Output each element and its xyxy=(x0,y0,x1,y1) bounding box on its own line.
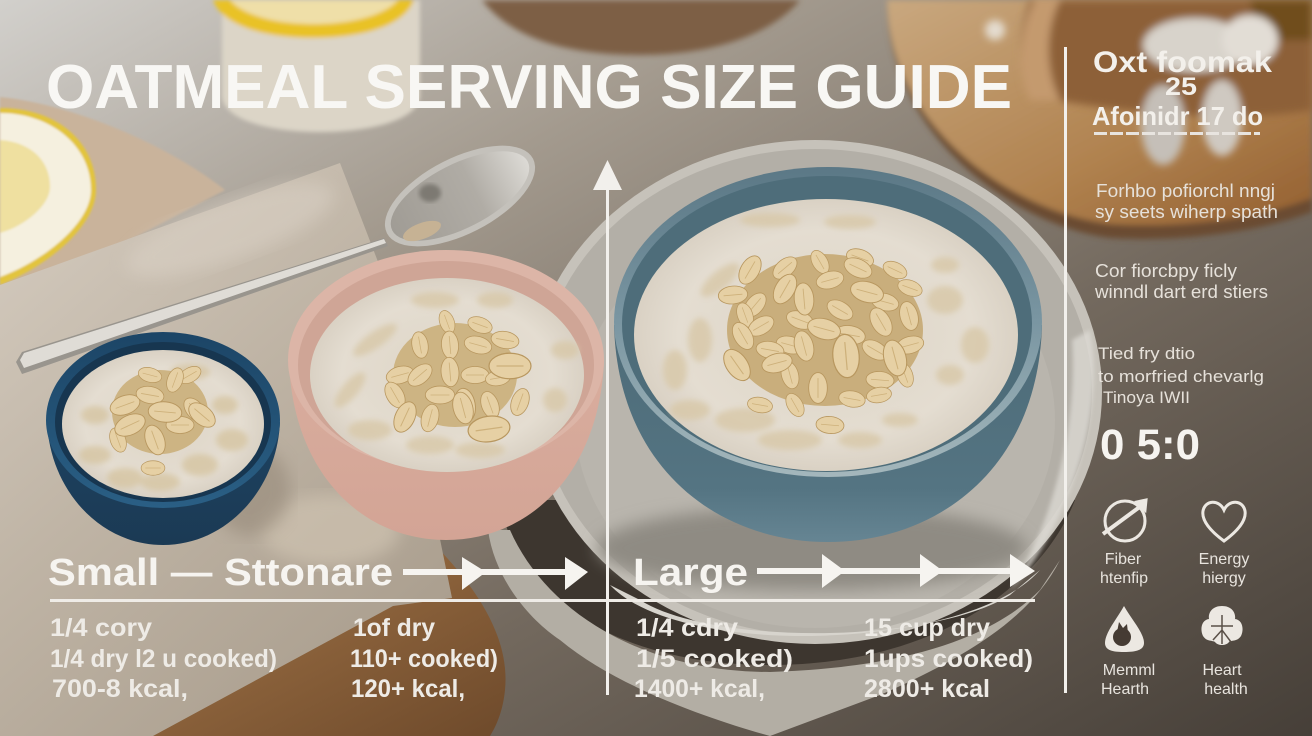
right panel divider xyxy=(1064,47,1067,693)
label: mental health: Memml xyxy=(1103,662,1155,679)
column: standard serving: 120+ kcal, xyxy=(351,675,465,703)
column: standard serving: 110+ cooked) xyxy=(350,645,498,673)
plate xyxy=(528,140,1102,644)
column: small serving: 1/4 dry l2 u cooked) xyxy=(50,645,277,673)
icon: heart health xyxy=(1201,606,1243,645)
side text block 1: sy seets wiherp spath xyxy=(1095,202,1278,222)
side text block 3: Tinoya IWII xyxy=(1103,388,1190,407)
wooden board top center xyxy=(482,0,800,55)
dark gap beneath plate xyxy=(500,500,1075,665)
column: extra large serving xyxy=(864,614,1033,703)
label: fiber xyxy=(1100,551,1148,587)
label: mental health xyxy=(1101,662,1155,698)
vertical axis with arrow xyxy=(593,160,622,695)
lemon slice xyxy=(0,108,96,285)
label: heart health xyxy=(1202,662,1248,698)
oats: medium bowl xyxy=(381,308,533,445)
column: standard serving xyxy=(350,614,498,703)
large heading with arrows: Large xyxy=(633,552,748,594)
medium bowl xyxy=(288,250,604,540)
small and standard heading with arrows xyxy=(48,552,588,594)
icon: fiber xyxy=(1103,500,1146,541)
label: energy xyxy=(1199,551,1249,587)
column: large serving xyxy=(634,614,793,703)
horizontal divider xyxy=(50,599,1035,602)
column: small serving xyxy=(50,614,277,703)
column: small serving: 700-8 kcal, xyxy=(52,675,188,703)
lower wooden board xyxy=(130,540,506,736)
wooden board behind lemon xyxy=(0,97,225,290)
milk clumps: large bowl xyxy=(663,213,989,450)
side big number: 0 5:0 xyxy=(1100,421,1200,469)
blurred bread and garnish top right xyxy=(985,0,1312,165)
side text block 2 xyxy=(1094,261,1268,302)
icon: energy heart xyxy=(1203,502,1245,541)
label: energy: Energy xyxy=(1199,551,1249,568)
label: energy: hiergy xyxy=(1202,570,1246,587)
lower cloth under plate xyxy=(488,530,1060,736)
small bowl xyxy=(46,332,280,545)
column: extra large serving: 2800+ kcal xyxy=(864,675,990,703)
side text block 2: winndl dart erd stiers xyxy=(1094,282,1268,302)
side text block 3: to morfried chevarlg xyxy=(1098,367,1264,386)
label: heart health: Heart xyxy=(1202,662,1242,679)
column: large serving: 1/4 cdry xyxy=(636,614,738,642)
label: fiber: Fiber xyxy=(1105,551,1142,568)
oats: large bowl xyxy=(718,245,926,435)
column: extra large serving: 1ups cooked) xyxy=(864,645,1033,673)
label: mental health: Hearth xyxy=(1101,681,1149,698)
oats: small bowl xyxy=(107,363,220,475)
side panel heading: Oxt foomak xyxy=(1093,46,1272,79)
side text block 1 xyxy=(1095,181,1278,222)
column: large serving: 1/5 cooked) xyxy=(636,645,793,673)
large bowl xyxy=(614,167,1042,542)
side panel heading: Afoinidr 17 do xyxy=(1092,101,1263,131)
side text block 3: Tied fry dtio xyxy=(1098,344,1195,363)
column: large serving: 1400+ kcal, xyxy=(634,675,765,703)
small and standard heading with arrows: Small — Sttonare xyxy=(48,552,393,594)
side text block 2: Cor fiorcbpy ficly xyxy=(1095,261,1237,281)
napkin xyxy=(0,163,452,736)
wooden board top right xyxy=(887,0,1312,239)
column: standard serving: 1of dry xyxy=(353,614,435,642)
icon: flame drop xyxy=(1105,606,1144,652)
side panel heading: 25 xyxy=(1165,73,1197,101)
large heading with arrows xyxy=(633,552,1035,594)
side text block 1: Forhbo pofiorchl nngj xyxy=(1096,181,1275,201)
column: small serving: 1/4 cory xyxy=(50,614,152,642)
milk clumps: small bowl xyxy=(79,364,248,491)
column: extra large serving: 15 cup dry xyxy=(864,614,990,642)
label: heart health: health xyxy=(1204,681,1248,698)
side text block 3 xyxy=(1098,344,1264,407)
jar with lemon lid xyxy=(213,0,420,132)
spoon xyxy=(16,125,550,374)
label: fiber: htenfip xyxy=(1100,570,1148,587)
side panel heading xyxy=(1092,46,1272,134)
milk clumps: medium bowl xyxy=(330,292,579,458)
title: OATMEAL SERVING SIZE GUIDE xyxy=(46,53,1012,122)
